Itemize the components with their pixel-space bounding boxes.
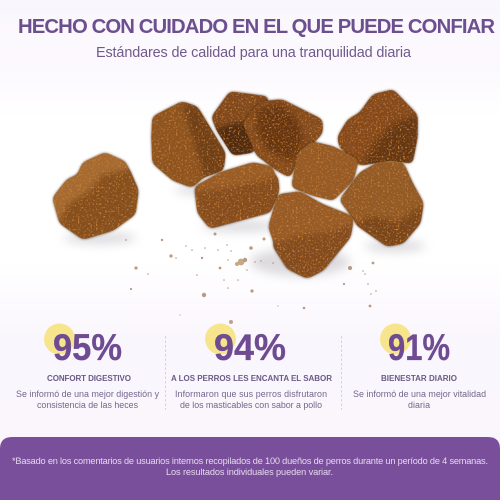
description: diaria xyxy=(408,400,430,410)
description: Informaron que sus perros disfrutaron xyxy=(175,389,327,399)
treat: center cube xyxy=(292,142,358,200)
description: Se informó de una mejor digestión y xyxy=(16,389,160,399)
treat: bottom center xyxy=(269,192,353,278)
icon: yellow circle xyxy=(44,324,75,354)
description xyxy=(16,389,160,410)
treat: right heart xyxy=(340,162,423,246)
percentage: 94% xyxy=(214,327,286,368)
label: CONFORT DIGESTIVO xyxy=(47,374,131,383)
treat: center left xyxy=(195,163,279,228)
stat: 91% bienestar xyxy=(353,324,486,410)
treat: top left xyxy=(152,102,225,187)
footnote: *Basado en los comentarios de usuarios internos recopilados de 100 dueños de perros durante un período de 4 semanas. xyxy=(12,456,488,466)
photo: heart-shaped dog treats xyxy=(53,90,425,324)
description: consistencia de las heces xyxy=(37,400,139,410)
description xyxy=(353,389,486,410)
description: de los masticables con sabor a pollo xyxy=(180,400,322,410)
treat shadows xyxy=(64,185,425,276)
stat: 95% confort digestivo xyxy=(16,324,160,410)
subtitle: Estándares de calidad para una tranquilidad diaria xyxy=(96,45,411,61)
title: HECHO CON CUIDADO EN EL QUE PUEDE CONFIAR xyxy=(18,16,495,38)
percentage: 95% xyxy=(53,327,122,368)
stat: 94% sabor xyxy=(171,324,332,410)
divider xyxy=(340,336,342,410)
icon: yellow circle xyxy=(205,324,236,354)
footer panel xyxy=(0,437,500,500)
percentage: 91% xyxy=(388,327,450,368)
footnote xyxy=(12,456,488,477)
divider xyxy=(164,336,166,410)
description xyxy=(175,389,327,410)
crumbs xyxy=(125,232,377,324)
description: Se informó de una mejor vitalidad xyxy=(353,389,486,399)
label: BIENESTAR DIARIO xyxy=(381,374,457,383)
treat: top right xyxy=(338,90,417,165)
treat: top middle back xyxy=(212,92,268,155)
icon: yellow circle xyxy=(380,324,411,354)
treat: top middle front xyxy=(243,100,322,177)
footnote: Los resultados individuales pueden variar. xyxy=(166,467,333,477)
label: A LOS PERROS LES ENCANTA EL SABOR xyxy=(171,374,332,383)
treat: left heart xyxy=(53,153,138,239)
